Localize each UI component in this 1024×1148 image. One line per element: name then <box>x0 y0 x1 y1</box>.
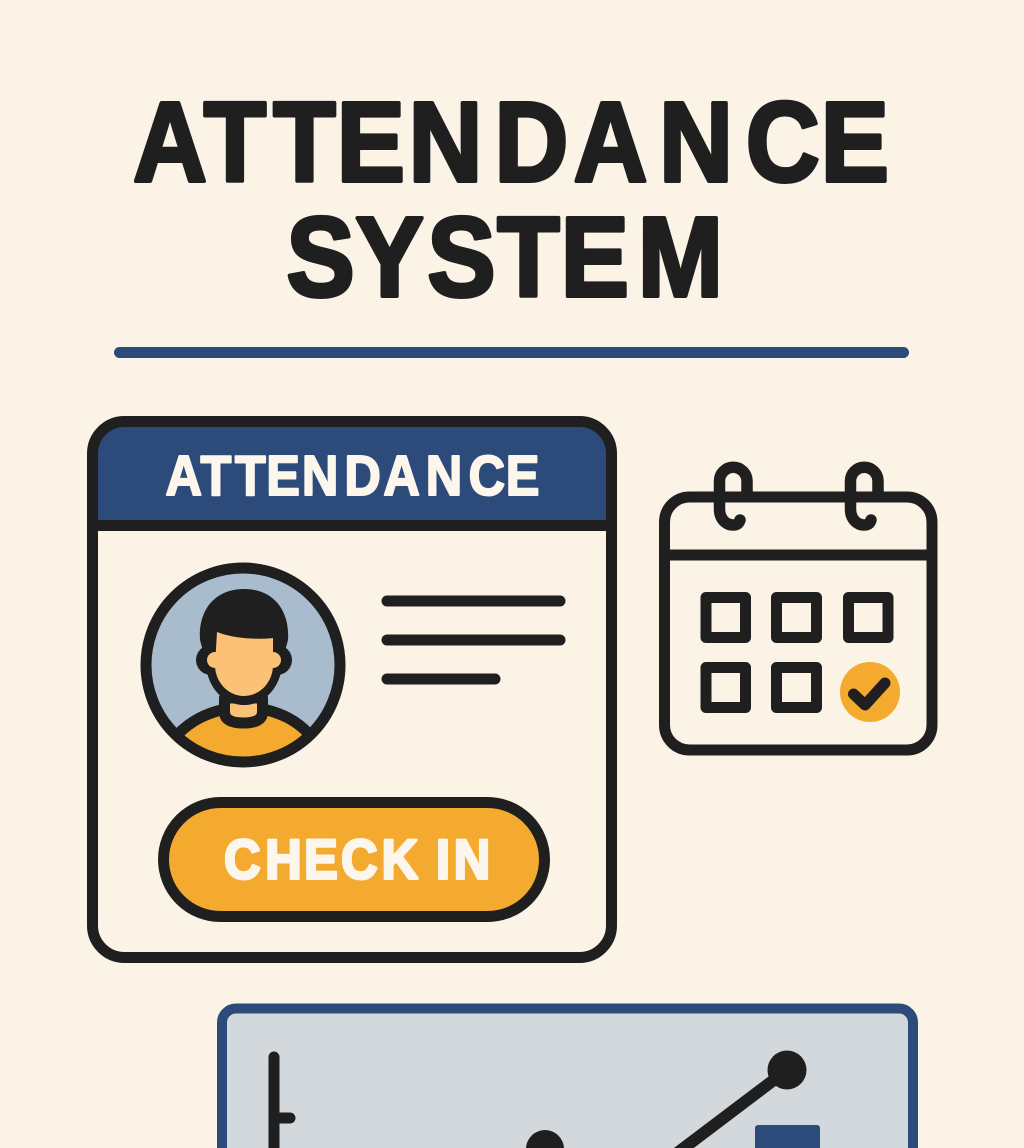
panel: line chart <box>222 1008 913 1148</box>
panel: attendance card <box>92 422 612 958</box>
details text lines <box>387 601 560 679</box>
avatar ears <box>207 652 281 668</box>
avatar neck <box>224 698 262 723</box>
card outline <box>92 422 612 958</box>
avatar ears outline <box>196 645 292 675</box>
chart axis <box>274 1057 290 1148</box>
avatar ring <box>146 568 340 762</box>
check in button: CHECK IN <box>224 829 490 891</box>
chart trend line <box>526 1050 806 1148</box>
title divider <box>114 347 909 358</box>
card header band <box>92 422 612 526</box>
check in button <box>164 802 544 916</box>
icon: user avatar <box>146 568 340 762</box>
chart bar <box>755 1125 820 1148</box>
avatar hair and head outline <box>200 589 288 705</box>
calendar checked day <box>840 662 900 722</box>
calendar day squares <box>706 598 888 708</box>
avatar face <box>215 632 273 696</box>
title <box>133 78 889 320</box>
avatar shirt <box>178 710 309 757</box>
card header label: ATTENDANCE <box>166 444 539 508</box>
title: ATTENDANCE <box>133 78 889 205</box>
icon: calendar <box>664 467 932 750</box>
calendar binder rings <box>720 467 878 525</box>
title: SYSTEM <box>286 193 723 320</box>
